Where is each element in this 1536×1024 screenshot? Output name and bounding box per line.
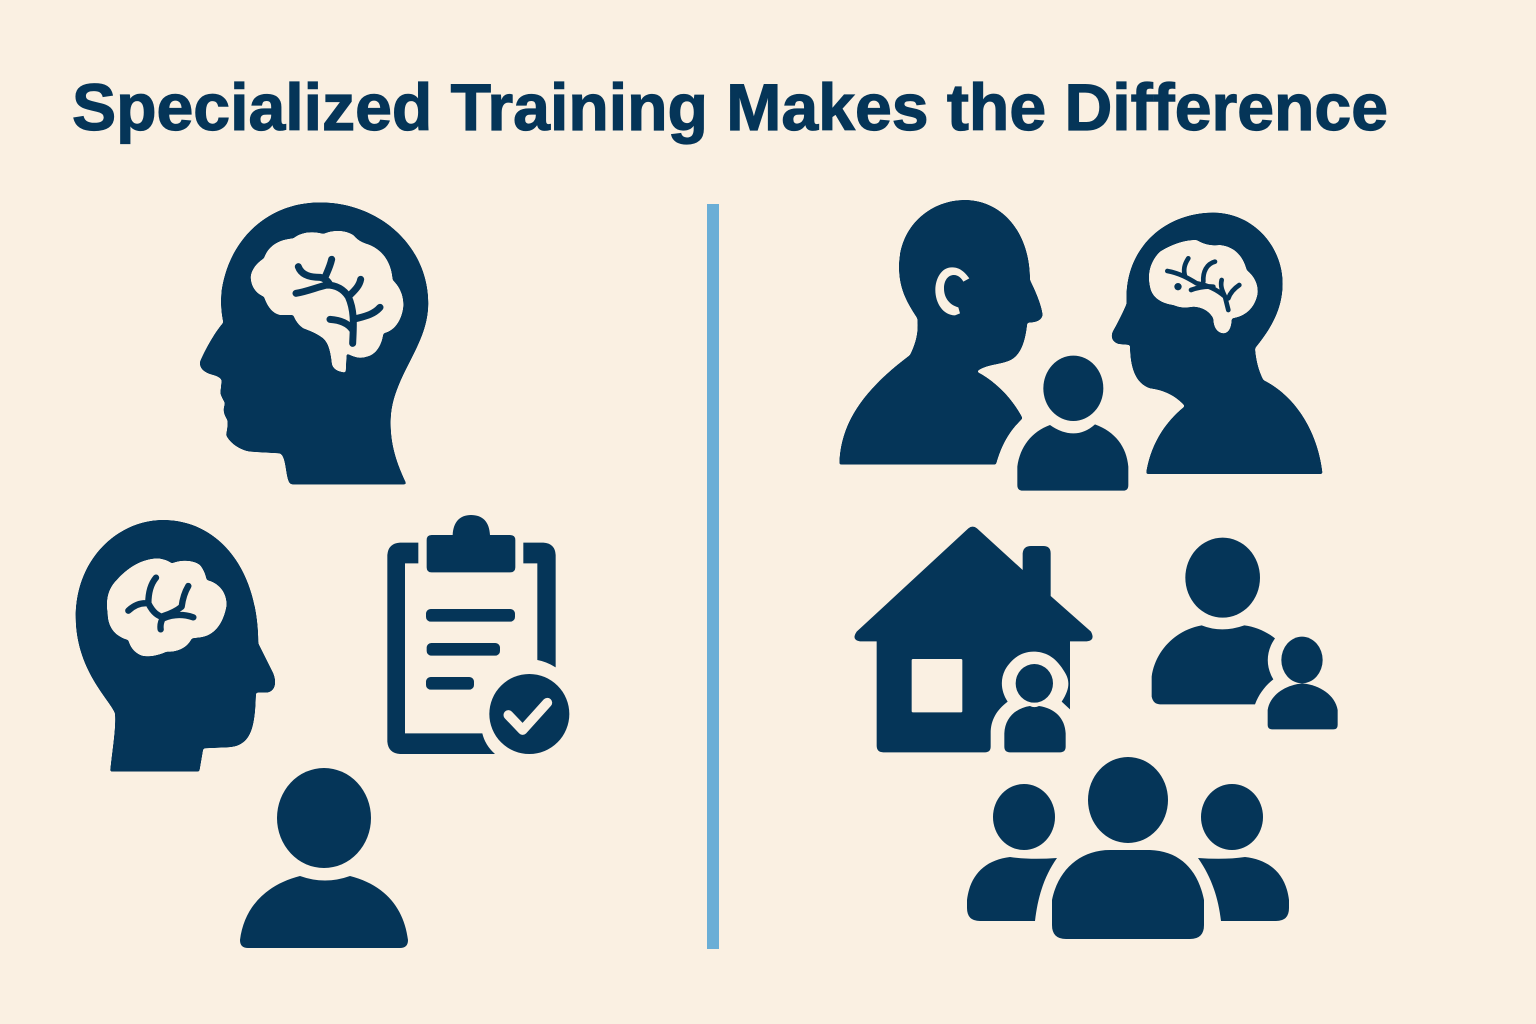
icon: group of three people — [967, 757, 1289, 939]
brain folds — [296, 259, 380, 343]
icon: single person — [240, 768, 408, 948]
panel: left specialist icons — [76, 202, 569, 948]
right head with brain — [1112, 213, 1323, 474]
title: Specialized Training Makes the Difference — [72, 70, 1388, 144]
brain — [251, 231, 403, 373]
divider between panels — [707, 204, 719, 949]
icon: adult with child — [1152, 538, 1338, 729]
brain — [107, 558, 227, 656]
icon: two heads with small person — [839, 200, 1323, 491]
icon: clipboard with check badge — [387, 515, 569, 754]
left head with ear — [839, 200, 1043, 465]
brain folds — [128, 578, 193, 629]
icon: small head with brain — [76, 520, 275, 772]
panel: right family and community icons — [839, 200, 1338, 939]
small person — [1043, 356, 1103, 421]
icon: house with person — [854, 527, 1093, 752]
icon: large head with brain — [200, 202, 428, 484]
